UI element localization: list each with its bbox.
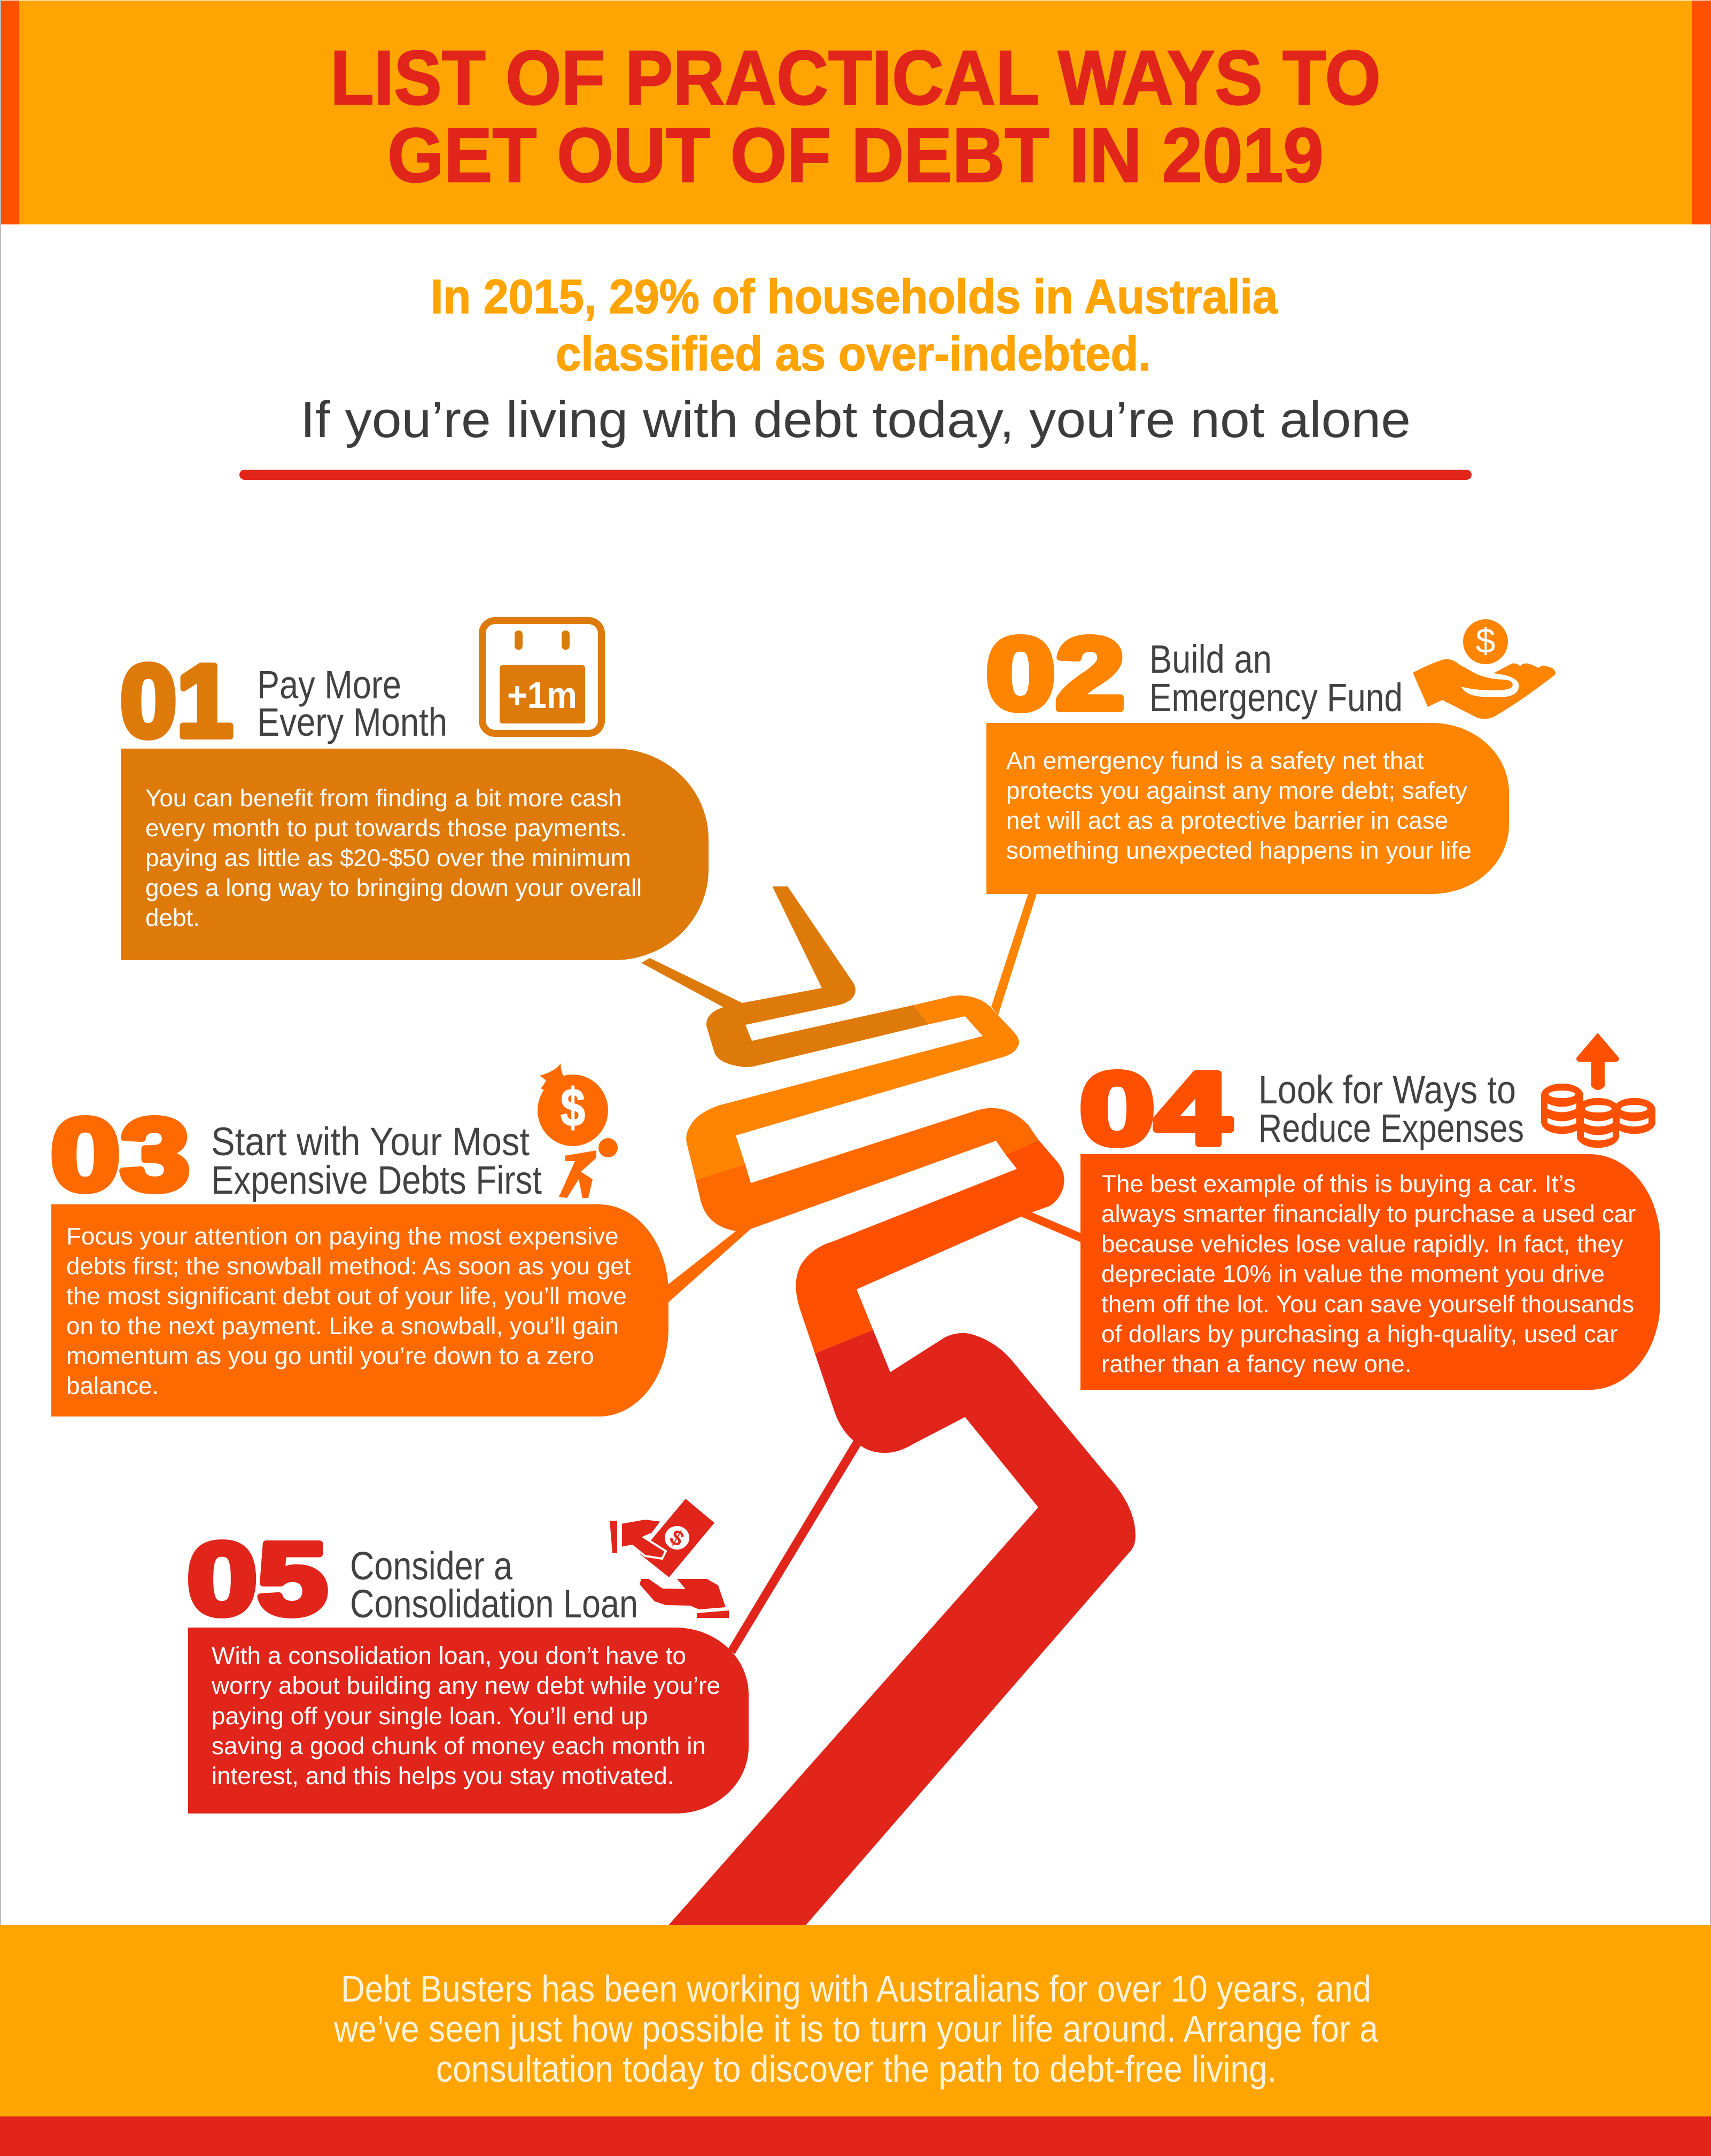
text box 04: The best example of this is buying a car. It’s xyxy=(1101,1170,1576,1197)
text box 05: With a consolidation loan, you don’t have to xyxy=(212,1642,686,1669)
number 04: 04 xyxy=(1079,1051,1231,1166)
number 03: 03 xyxy=(50,1097,190,1212)
icon: person carrying money bag xyxy=(538,1063,618,1198)
heading 05 xyxy=(350,1544,638,1626)
text box 05: saving a good chunk of money each month in xyxy=(212,1732,706,1760)
subheading statistic xyxy=(431,270,1278,381)
heading 03 xyxy=(211,1119,542,1202)
text box 01: You can benefit from finding a bit more cash xyxy=(145,784,622,812)
panel: step 03 xyxy=(50,1063,668,1416)
text box 05 xyxy=(188,1628,749,1813)
subheading tagline: If you’re living with debt today, you’re not alone xyxy=(300,391,1411,448)
text box 03: on to the next payment. Like a snowball, you’ll gain xyxy=(66,1312,619,1340)
heading 04: Reduce Expenses xyxy=(1258,1106,1524,1150)
text box 02: protects you against any more debt; safety xyxy=(1006,777,1467,804)
icon: person carrying money bag: $ xyxy=(561,1078,585,1138)
road segment: dark orange xyxy=(706,886,929,1067)
heading 01: Every Month xyxy=(257,700,447,744)
text box 02: something unexpected happens in your life xyxy=(1006,837,1472,864)
heading 05: Consider a xyxy=(350,1544,513,1588)
subheading statistic: classified as over-indebted. xyxy=(556,328,1151,381)
text box 03: momentum as you go until you’re down to a zero xyxy=(66,1342,594,1369)
heading 02: Build an xyxy=(1149,637,1272,681)
number 05: 05 xyxy=(187,1521,328,1636)
text box 03: balance. xyxy=(66,1372,159,1399)
icon: hand passing money to hand: $ xyxy=(666,1525,688,1551)
footer text: we’ve seen just how possible it is to turn your life around. Arrange for a xyxy=(333,2008,1378,2050)
text box 05: worry about building any new debt while you’re xyxy=(211,1672,720,1699)
road segment: deep orange xyxy=(696,1108,1039,1231)
text box 02: An emergency fund is a safety net that xyxy=(1006,747,1424,774)
panel: step 04 xyxy=(1079,1033,1660,1390)
icon: calendar plus one month: +1m xyxy=(507,674,577,716)
text box 01: every month to put towards those payments. xyxy=(145,814,627,842)
winding debt road xyxy=(668,886,1136,1925)
panel: step 02 xyxy=(986,616,1556,894)
text box 01: goes a long way to bringing down your overall xyxy=(145,874,642,901)
heading 02 xyxy=(1149,637,1403,720)
header banner xyxy=(1,1,1711,224)
road segment: red orange xyxy=(796,1140,1064,1353)
footer banner xyxy=(0,1925,1711,2156)
text box 01 xyxy=(121,749,709,960)
text box 04: depreciate 10% in value the moment you drive xyxy=(1101,1260,1605,1288)
title: GET OUT OF DEBT IN 2019 xyxy=(387,112,1324,198)
footer text: Debt Busters has been working with Australians for over 10 years, and xyxy=(341,1968,1371,2010)
icon: hand passing money to hand xyxy=(610,1499,729,1618)
icon: hand holding coin xyxy=(1413,619,1556,719)
panel: step 05 xyxy=(187,1499,749,1813)
icon: coins with up arrow xyxy=(1541,1033,1655,1148)
text box 04: rather than a fancy new one. xyxy=(1101,1350,1411,1377)
text box 05: interest, and this helps you stay motivated. xyxy=(212,1762,674,1789)
panel: step 01 xyxy=(120,621,709,960)
text box 04: them off the lot. You can save yourself thousands xyxy=(1101,1290,1634,1318)
heading 02: Emergency Fund xyxy=(1149,675,1403,720)
text box 04: of dollars by purchasing a high-quality, used car xyxy=(1101,1320,1618,1348)
road segment: orange xyxy=(686,995,1019,1180)
text box 04 xyxy=(1080,1154,1660,1390)
heading 03: Expensive Debts First xyxy=(211,1158,542,1202)
footer text xyxy=(333,1968,1378,2090)
road segment: red xyxy=(668,1330,1136,1925)
icon: calendar plus one month xyxy=(482,621,602,733)
subheading statistic: In 2015, 29% of households in Australia xyxy=(431,270,1278,324)
text box 01: paying as little as $20-$50 over the minimum xyxy=(145,844,631,871)
heading 01: Pay More xyxy=(257,663,401,707)
icon: hand holding coin: $ xyxy=(1476,621,1495,660)
text box 02 xyxy=(986,723,1509,894)
number 01: 01 xyxy=(120,643,233,758)
heading 04: Look for Ways to xyxy=(1258,1068,1516,1112)
title: LIST OF PRACTICAL WAYS TO xyxy=(330,35,1381,121)
heading 04 xyxy=(1258,1068,1524,1150)
text box 03: the most significant debt out of your life, you’ll move xyxy=(66,1282,627,1310)
connector lines xyxy=(641,892,1085,1654)
text box 03: Focus your attention on paying the most expensive xyxy=(66,1223,619,1250)
text box 01: debt. xyxy=(145,904,200,931)
footer text: consultation today to discover the path to debt-free living. xyxy=(436,2048,1277,2090)
heading 05: Consolidation Loan xyxy=(350,1582,638,1626)
text box 05: paying off your single loan. You’ll end up xyxy=(212,1702,648,1730)
title xyxy=(330,35,1381,198)
number 02: 02 xyxy=(986,616,1125,731)
text box 02: net will act as a protective barrier in case xyxy=(1006,807,1448,834)
text box 03: debts first; the snowball method: As soon as you get xyxy=(66,1252,631,1280)
text box 03 xyxy=(51,1204,668,1416)
text box 04: always smarter financially to purchase a used car xyxy=(1101,1200,1636,1227)
heading 01 xyxy=(257,663,447,744)
text box 04: because vehicles lose value rapidly. In fact, they xyxy=(1101,1230,1623,1258)
heading 03: Start with Your Most xyxy=(211,1119,530,1164)
